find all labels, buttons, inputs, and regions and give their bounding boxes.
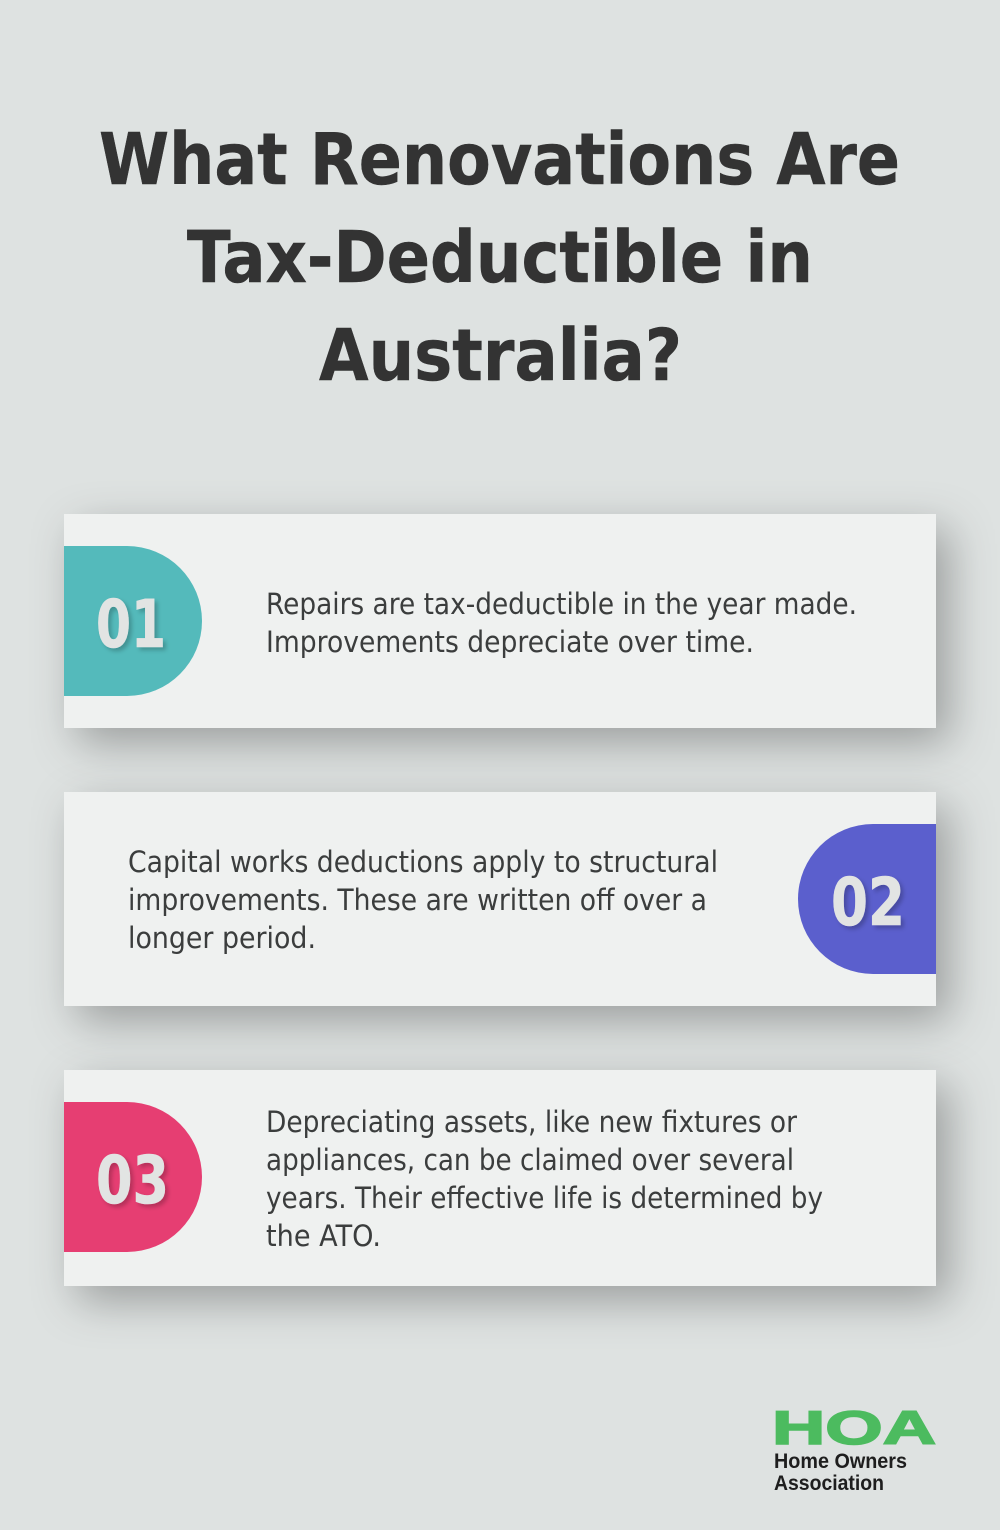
text: step 03 description: Depreciating assets, like new fixtures or (266, 1105, 798, 1139)
title (99, 118, 900, 397)
title: Australia? (319, 314, 682, 397)
logo: HOA Home Owners Association (772, 1401, 936, 1495)
number badge 03: 03 (96, 1142, 169, 1219)
panel: step 03 (64, 1070, 936, 1286)
number badge 01 (64, 546, 202, 696)
logo: HOA Home Owners Association: HOA (772, 1401, 936, 1454)
text: step 03 description: appliances, can be claimed over several (266, 1143, 794, 1177)
text: step 03 description (266, 1105, 823, 1253)
title: Tax-Deductible in (187, 216, 813, 299)
text: step 03 description: years. Their effective life is determined by (266, 1181, 823, 1215)
text: step 01 description: Improvements depreciate over time. (266, 625, 754, 659)
text: step 02 description: Capital works deductions apply to structural (128, 845, 718, 879)
title: What Renovations Are (99, 118, 900, 201)
text: step 01 description (266, 587, 857, 659)
text: step 02 description: improvements. These are written off over a (128, 883, 707, 917)
logo: HOA Home Owners Association: Home Owners (774, 1450, 907, 1473)
logo: HOA Home Owners Association: Association (774, 1472, 884, 1495)
text: step 02 description: longer period. (128, 921, 316, 955)
number badge 02 (798, 824, 936, 974)
number badge 02: 02 (831, 864, 905, 941)
text: step 03 description: the ATO. (266, 1219, 381, 1253)
panel: step 01 (64, 514, 936, 728)
number badge 01: 01 (96, 586, 166, 663)
panel: step 02 (64, 792, 936, 1006)
number badge 03 (64, 1102, 202, 1252)
text: step 02 description (128, 845, 718, 955)
text: step 01 description: Repairs are tax-deductible in the year made. (266, 587, 857, 621)
